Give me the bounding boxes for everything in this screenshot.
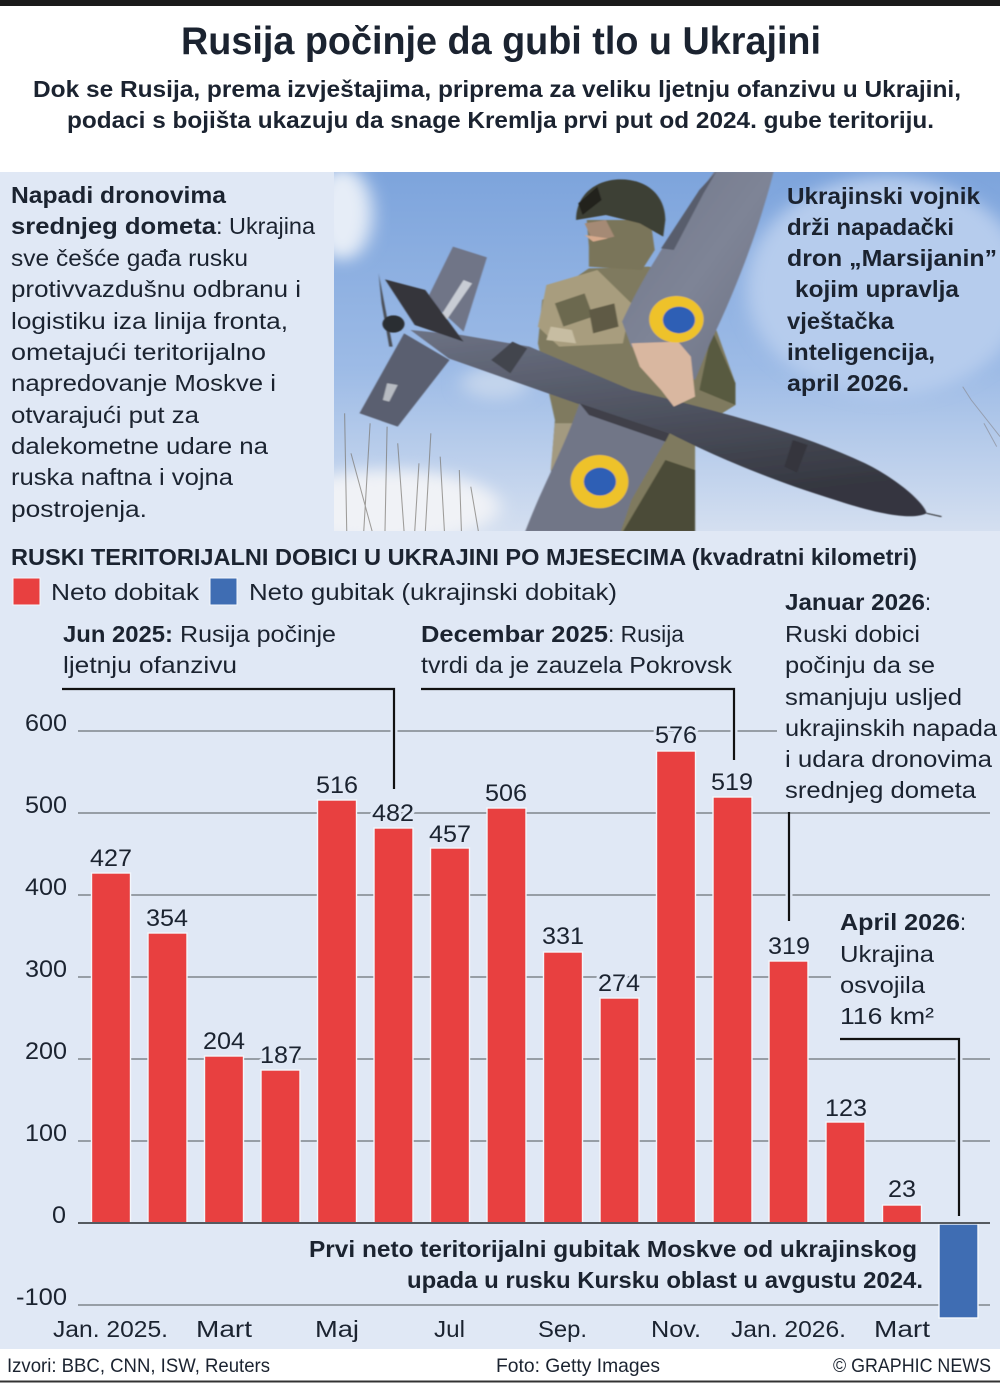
month labels: Jul [434,1316,465,1342]
callout: December 2025 [421,621,734,760]
helmet [576,179,665,237]
month labels: Jan. 2025. [53,1316,168,1342]
callout: April 2026: osvojila [840,972,926,998]
photo caption: Ukrajinski vojnik [787,183,981,209]
subtitle [33,76,961,133]
callout: first net loss [309,1236,923,1293]
photo caption: drži napadački [787,214,954,240]
value labels: 576 [655,722,697,749]
y-axis labels: 500 [25,792,67,819]
y-axis labels: 600 [25,710,67,737]
callout: June 2025: Rusija počinje [180,621,336,647]
text block: mid-range drone attacks [11,182,316,522]
value labels: 482 [372,800,414,827]
callout: January 2026: Januar 2026 [785,589,925,615]
callout: December 2025: Decembar 2025 [421,621,608,647]
month labels: Mart [874,1316,931,1342]
month labels: Mart [196,1316,253,1342]
callout: April 2026 [840,909,966,1216]
text block: mid-range drone attacks: logistiku iza linija fronta, [11,308,288,334]
value labels: 123 [825,1095,867,1122]
roundels [649,296,704,343]
footer: Izvori: BBC, CNN, ISW, Reuters [7,1355,270,1377]
footer [0,1355,1000,1382]
value labels: 354 [146,905,188,932]
callout: April 2026: 116 km² [840,1003,934,1029]
month labels: Maj [315,1316,359,1342]
text block: mid-range drone attacks: ometajući teritorijalno [11,339,266,365]
callout: first net loss: upada u rusku Kursku oblast u avgustu 2024. [407,1267,923,1293]
upper wing [622,172,774,380]
value labels: 519 [711,769,753,796]
bars [92,751,978,1318]
value labels: 187 [260,1042,302,1069]
text block: mid-range drone attacks: srednjeg dometa [11,213,217,239]
callout: January 2026: ukrajinskih napada [785,715,998,741]
callout: January 2026: Ruski dobici [785,621,920,647]
callout: June 2025: Jun 2025: [63,621,173,647]
legend [13,578,617,605]
value labels: 274 [598,970,640,997]
photo caption: vještačka [787,308,895,334]
photo caption: dron „Marsijanin” [787,245,997,271]
callout: January 2026: : [925,589,931,615]
lower wing [525,403,670,532]
y-axis labels: 300 [25,956,67,983]
text block: mid-range drone attacks: sve češće gađa rusku [11,245,248,271]
value labels: 331 [542,923,584,950]
photo caption [787,183,997,396]
text block: mid-range drone attacks: otvarajući put za [11,402,200,428]
callout: December 2025: : Rusija [608,621,685,647]
text block: mid-range drone attacks: : Ukrajina [216,213,316,239]
month labels: Jan. 2026. [731,1316,846,1342]
text block: mid-range drone attacks: postrojenja. [11,496,147,522]
y-axis labels: -100 [16,1284,67,1311]
callout: first net loss: Prvi neto teritorijalni gubitak Moskve od ukrajinskog [309,1236,917,1262]
value labels: 319 [768,933,810,960]
callout: December 2025: tvrdi da je zauzela Pokrovsk [421,652,732,678]
text block: mid-range drone attacks: ruska naftna i vojna [11,464,234,490]
fin lower [359,333,450,427]
text block: mid-range drone attacks: napredovanje Moskve i [11,370,276,396]
value labels: 204 [203,1028,245,1055]
grid lines [78,722,1000,1305]
subtitle: podaci s bojišta ukazuju da snage Kremlja prvi put od 2024. gube teritoriju. [67,107,934,133]
callout: January 2026: smanjuju usljed [785,684,962,710]
text block: mid-range drone attacks: dalekometne udare na [11,433,269,459]
value labels: 516 [316,772,358,799]
legend: Neto gubitak (ukrajinski dobitak) [249,579,617,605]
text block: mid-range drone attacks: Napadi dronovima [11,182,227,208]
y-axis labels: 400 [25,874,67,901]
y-axis labels: 100 [25,1120,67,1147]
y-axis labels: 200 [25,1038,67,1065]
text block: mid-range drone attacks: protivvazdušnu odbranu i [11,276,301,302]
photo: soldier holding drone [334,172,1000,531]
value labels: 506 [485,780,527,807]
bar chart [16,710,1000,1342]
subtitle: Dok se Rusija, prema izvještajima, priprema za veliku ljetnju ofanzivu u Ukrajini, [33,76,961,102]
title: Rusija počinje da gubi tlo u Ukrajini [181,20,821,63]
zero line [78,1222,990,1224]
month labels: Nov. [651,1316,701,1342]
callout: April 2026: : [960,909,966,935]
callout: June 2025: ljetnju ofanzivu [63,652,237,678]
callout: January 2026: počinju da se [785,652,935,678]
y-axis labels [16,710,67,1311]
callout: January 2026: i udara dronovima [785,746,993,772]
legend: Neto dobitak [51,579,199,605]
footer: Foto: Getty Images [496,1355,660,1377]
callout: April 2026: Ukrajina [840,941,935,967]
callout: April 2026: April 2026 [840,909,960,935]
soldier body [538,267,735,532]
top black bar [0,0,1000,6]
callout: January 2026: srednjeg dometa [785,777,977,803]
value labels [90,722,916,1203]
fin upper [427,247,487,332]
head [587,220,655,270]
hand [631,342,695,407]
rudder [385,279,464,342]
photo caption: april 2026. [787,370,909,396]
fuselage [410,330,927,516]
month labels [53,1316,931,1342]
month labels: Sep. [538,1316,587,1342]
callout: June 2025 [62,621,394,789]
chart heading: RUSKI TERITORIJALNI DOBICI U UKRAJINI PO MJESECIMA (kvadratni kilometri) [11,544,917,570]
value labels: 427 [90,845,132,872]
photo caption: kojim upravlja [795,276,960,302]
photo caption: inteligencija, [787,339,935,365]
prop [379,273,393,347]
value labels: 457 [429,821,471,848]
y-axis labels: 0 [52,1202,66,1229]
photo drawing [334,172,1000,531]
value labels: 23 [888,1176,916,1203]
callout: January 2026 [785,589,998,921]
